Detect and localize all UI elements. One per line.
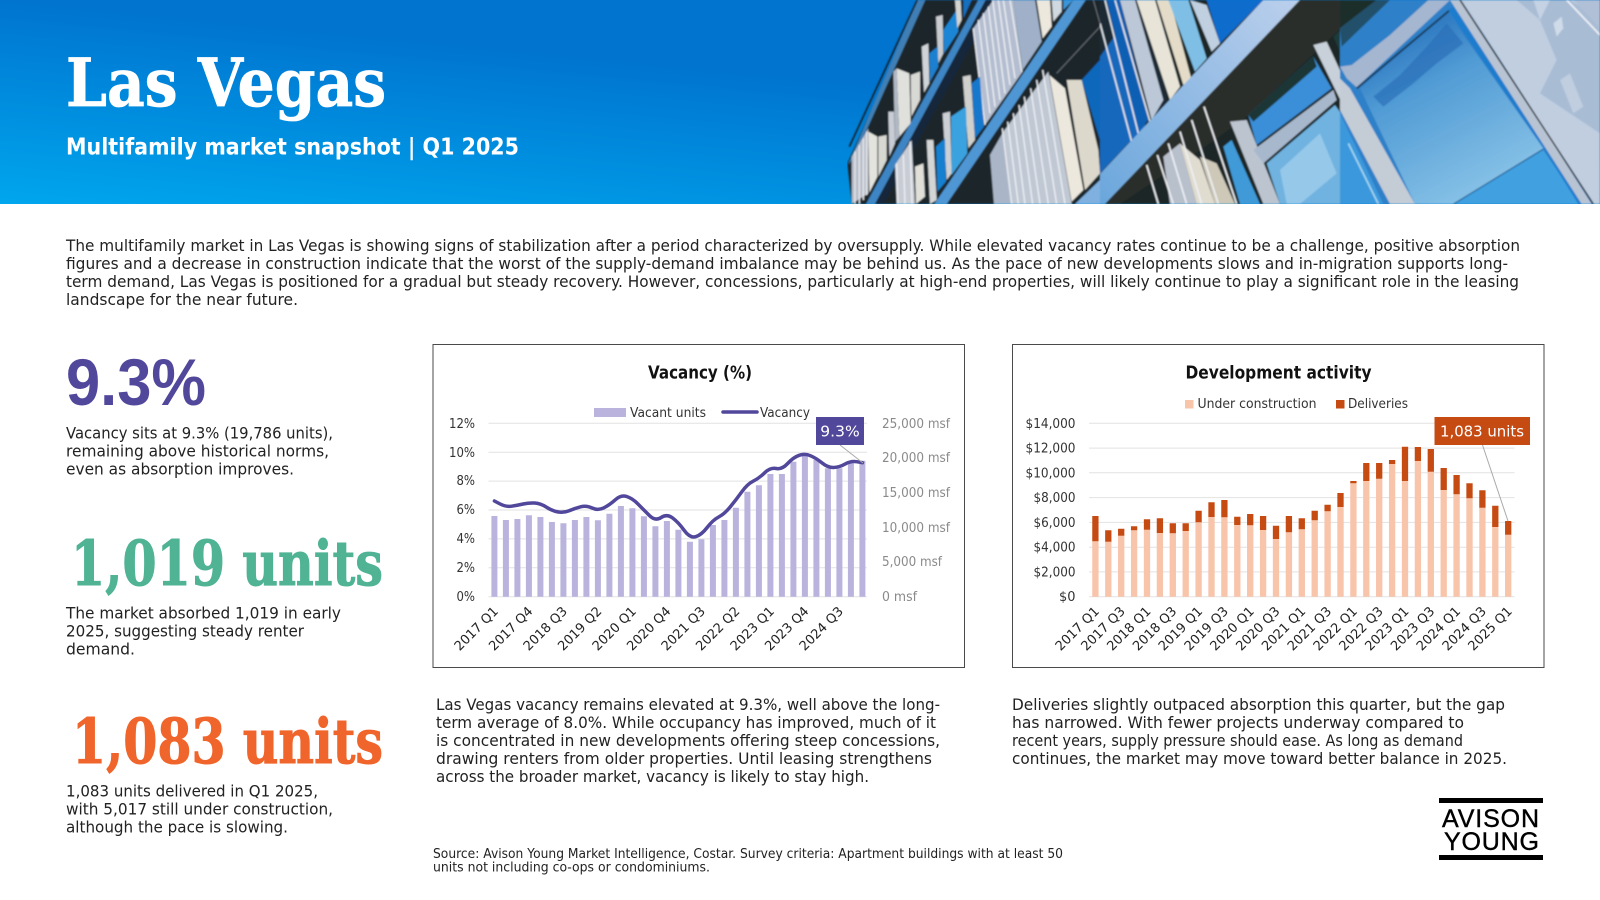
chart title: Development activity (1186, 364, 1372, 384)
x axis labels: 2019 Q1 (1156, 604, 1206, 654)
subtitle: Multifamily market snapshot | Q1 2025 (66, 132, 519, 160)
left axis labels: 2% (456, 560, 475, 576)
left axis labels: 6% (456, 502, 475, 518)
x axis labels: 2024 Q3 (1440, 604, 1490, 654)
left axis labels: 12% (449, 416, 475, 432)
stat description: with 5,017 still under construction, (66, 800, 333, 818)
bars: deliveries (1095, 447, 1508, 542)
intro paragraph: figures and a decrease in construction indicate that the worst of the supply-demand imbalance may be behind us. As the pace of new developments slows and in-migration supports long- (66, 254, 1508, 273)
stat description: Vacancy sits at 9.3% (19,786 units), (66, 424, 333, 442)
source note: units not including co-ops or condominiums. (433, 860, 710, 876)
y axis labels: $4,000 (1034, 540, 1076, 556)
intro paragraph: term demand, Las Vegas is positioned for a gradual but steady recovery. However, concessions, particularly at high-end properties, will likely continue to play a significant role in the leasing (66, 272, 1519, 291)
stat description: although the pace is slowing. (66, 818, 288, 836)
y axis labels: $6,000 (1034, 515, 1076, 531)
right axis labels: 25,000 msf (882, 416, 951, 432)
y axis labels: $10,000 (1026, 466, 1076, 482)
development commentary: Deliveries slightly outpaced absorption this quarter, but the gap (1012, 695, 1505, 714)
legend (1185, 396, 1408, 412)
left axis labels (449, 416, 475, 605)
x axis labels: 2018 Q3 (521, 604, 571, 654)
development commentary: continues, the market may move toward better balance in 2025. (1012, 749, 1507, 768)
left axis labels: 0% (456, 589, 475, 605)
vacancy commentary: term average of 8.0%. While occupancy has improved, much of it (436, 713, 936, 732)
x axis labels: 2018 Q3 (1130, 604, 1180, 654)
callout: 9.3% (816, 417, 864, 463)
stat: deliveries (66, 705, 383, 836)
x axis labels (1053, 604, 1516, 654)
x axis labels: 2023 Q3 (1388, 604, 1438, 654)
y axis labels: $8,000 (1034, 490, 1076, 506)
left axis labels: 10% (449, 445, 475, 461)
right axis labels: 15,000 msf (882, 485, 951, 501)
stat description: demand. (66, 640, 135, 658)
line: vacancy rate (494, 454, 862, 537)
vacancy commentary: Las Vegas vacancy remains elevated at 9.3%, well above the long- (436, 695, 940, 714)
x axis labels: 2017 Q1 (1053, 604, 1103, 654)
panel: development chart (1012, 344, 1544, 668)
x axis labels: 2021 Q1 (1259, 604, 1309, 654)
header photo: building facade (847, 0, 1600, 204)
x axis labels: 2017 Q1 (452, 604, 502, 654)
development commentary: has narrowed. With fewer projects underway compared to (1012, 713, 1464, 732)
callout: 1,083 units: 1,083 units (1440, 422, 1524, 440)
x axis labels: 2020 Q4 (624, 604, 674, 654)
bars: vacant units (494, 455, 862, 597)
title: Las Vegas (66, 44, 386, 122)
source note (433, 846, 1063, 876)
development commentary: recent years, supply pressure should ease. As long as demand (1012, 731, 1463, 750)
callout: 9.3%: 9.3% (820, 422, 860, 440)
stat number 9.3%: 9.3% (66, 345, 206, 419)
vacancy commentary: drawing renters from older properties. Until leasing strengthens (436, 749, 932, 768)
x axis labels: 2022 Q1 (1311, 604, 1361, 654)
right axis labels: 10,000 msf (882, 520, 951, 536)
stat number 1,083 units: 1,083 units (72, 705, 383, 778)
legend: Under construction (1198, 396, 1316, 412)
legend: Deliveries (1348, 396, 1408, 412)
x axis labels: 2019 Q2 (555, 604, 605, 654)
header banner (0, 0, 1600, 204)
x axis labels: 2019 Q3 (1182, 604, 1232, 654)
vacancy commentary: across the broader market, vacancy is likely to stay high. (436, 767, 869, 786)
right axis labels: 0 msf (882, 589, 918, 605)
legend (594, 405, 810, 421)
source note: Source: Avison Young Market Intelligence, Costar. Survey criteria: Apartment buildings with at least 50 (433, 846, 1063, 862)
x axis labels: 2023 Q1 (1362, 604, 1412, 654)
x axis labels (452, 604, 847, 654)
intro paragraph: The multifamily market in Las Vegas is showing signs of stabilization after a period characterized by oversupply. While elevated vacancy rates continue to be a challenge, positive absorption (65, 236, 1520, 255)
y axis labels: $2,000 (1034, 564, 1076, 580)
y axis labels: $0 (1059, 589, 1076, 605)
stat description (65, 604, 341, 658)
x axis labels: 2020 Q1 (1208, 604, 1258, 654)
callout: 1,083 units (1434, 417, 1530, 521)
grid lines (1089, 423, 1514, 597)
stat description (66, 782, 333, 836)
bars: under construction (1095, 461, 1508, 597)
vacancy commentary: is concentrated in new developments offering steep concessions, (436, 731, 940, 750)
left axis labels: 8% (456, 473, 475, 489)
stat description (66, 424, 333, 478)
right axis labels: 5,000 msf (882, 554, 943, 570)
x axis labels: 2023 Q4 (762, 604, 812, 654)
x axis labels: 2022 Q3 (1337, 604, 1387, 654)
stat description: 1,083 units delivered in Q1 2025, (66, 782, 318, 800)
stat: absorption (65, 527, 383, 658)
right axis labels (882, 416, 951, 605)
stat description: The market absorbed 1,019 in early (65, 604, 341, 622)
x axis labels: 2021 Q3 (659, 604, 709, 654)
intro paragraph: landscape for the near future. (66, 290, 298, 309)
x axis labels: 2018 Q1 (1104, 604, 1154, 654)
stat description: 2025, suggesting steady renter (66, 622, 304, 640)
vacancy commentary (436, 695, 940, 786)
stat description: even as absorption improves. (66, 460, 294, 478)
stat number 1,019 units: 1,019 units (71, 527, 383, 600)
stat description: remaining above historical norms, (66, 442, 329, 460)
x axis labels: 2021 Q3 (1285, 604, 1335, 654)
stat: vacancy (66, 345, 333, 478)
legend: Vacant units (630, 405, 706, 421)
x axis labels: 2024 Q3 (797, 604, 847, 654)
grid lines (488, 423, 867, 597)
y axis labels (1026, 416, 1076, 605)
logo: Avison Young: YOUNG (1444, 828, 1539, 856)
x axis labels: 2022 Q2 (693, 604, 743, 654)
x axis labels: 2017 Q4 (486, 604, 536, 654)
panel: vacancy chart (433, 344, 964, 668)
development commentary (1012, 695, 1507, 768)
x axis labels: 2023 Q1 (728, 604, 778, 654)
x axis labels: 2020 Q1 (590, 604, 640, 654)
y axis labels: $12,000 (1026, 440, 1076, 456)
logo: Avison Young (1439, 798, 1543, 860)
x axis labels: 2025 Q1 (1466, 604, 1516, 654)
x axis labels: 2017 Q3 (1079, 604, 1129, 654)
right axis labels: 20,000 msf (882, 450, 951, 466)
intro paragraph (65, 236, 1520, 309)
chart title: Vacancy (%) (648, 364, 752, 384)
y axis labels: $14,000 (1026, 416, 1076, 432)
logo: Avison Young: AVISON (1442, 805, 1539, 833)
x axis labels: 2024 Q1 (1414, 604, 1464, 654)
x axis labels: 2020 Q3 (1233, 604, 1283, 654)
legend: Vacancy (760, 405, 810, 421)
left axis labels: 4% (456, 531, 475, 547)
